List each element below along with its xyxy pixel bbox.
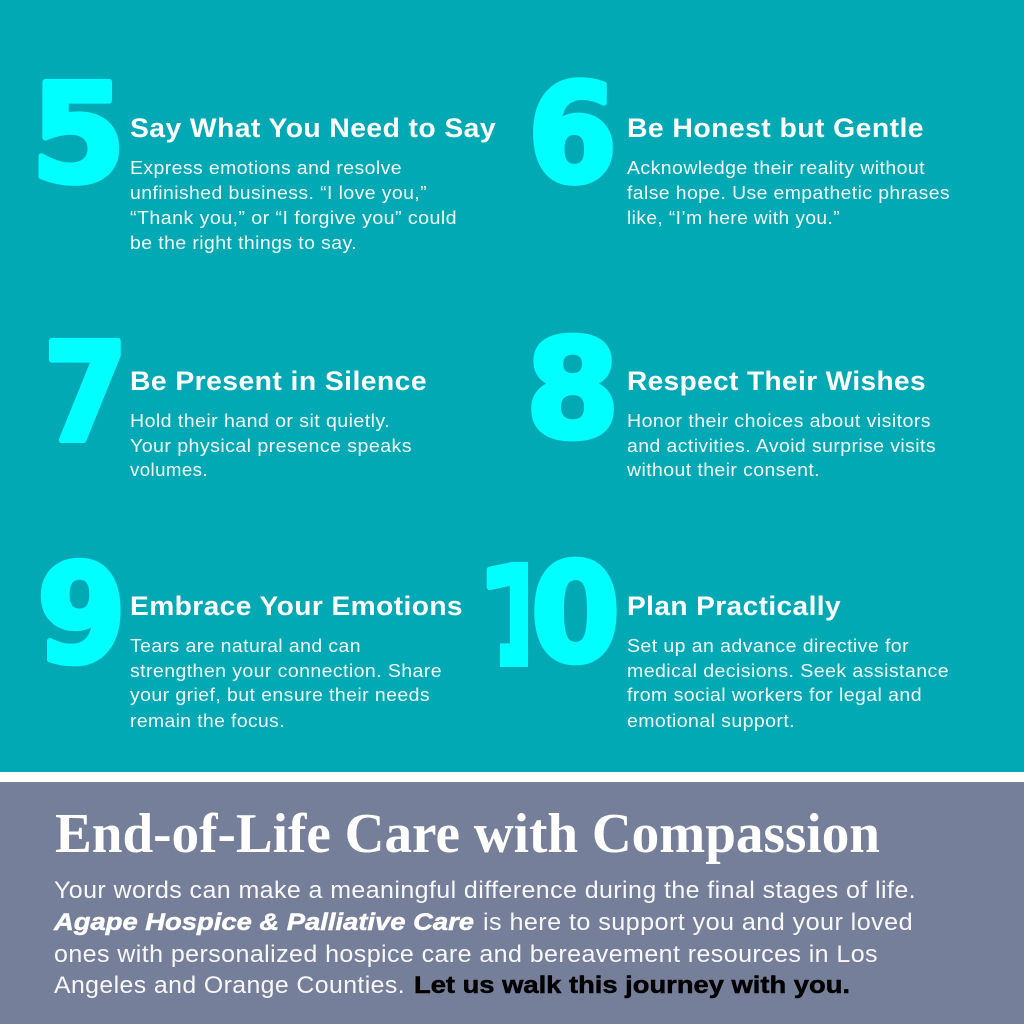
tip 7 xyxy=(44,315,427,480)
text block: tip 9 body: your grief, but ensure their needs xyxy=(130,684,430,705)
footer text block: Let us walk this journey with you. xyxy=(414,972,850,999)
number 10 xyxy=(486,556,617,667)
panel: teal tips background xyxy=(0,0,1024,772)
number 8: 8 xyxy=(526,311,619,469)
tip 8 xyxy=(526,311,936,480)
text block: tip 7 body: Hold their hand or sit quietly. xyxy=(130,410,390,431)
text block: tip 8 body: Honor their choices about visitors xyxy=(627,410,931,431)
text block: tip 10 body: emotional support. xyxy=(627,710,795,731)
text block: tip 8 body: without their consent. xyxy=(626,459,820,480)
text block: tip 9 body xyxy=(130,635,442,731)
text block: tip 5 body xyxy=(130,157,457,253)
text block: tip 10 body: Set up an advance directive for xyxy=(627,635,909,656)
tip 6 xyxy=(528,55,950,228)
text block: tip 6 body xyxy=(627,157,950,228)
white divider band xyxy=(0,772,1024,782)
text block: tip 9 body: strengthen your connection. Share xyxy=(130,660,442,681)
number 6: 6 xyxy=(528,55,617,214)
footer text block: Your words can make a meaningful difference during the final stages of life. xyxy=(54,877,916,904)
heading: Plan Practically: Plan Practically xyxy=(627,591,841,621)
text block: tip 10 body: medical decisions. Seek assistance xyxy=(627,660,949,681)
text block: tip 8 body xyxy=(626,410,936,480)
number 5: 5 xyxy=(31,56,126,214)
footer text block xyxy=(53,877,916,999)
text block: tip 9 body: remain the focus. xyxy=(130,710,285,731)
heading: Be Present in Silence: Be Present in Silence xyxy=(130,366,427,396)
text block: tip 5 body: unfinished business. “I love you,” xyxy=(130,182,427,203)
tip 9 xyxy=(37,536,463,731)
footer text block: Agape Hospice & Palliative Care xyxy=(53,909,474,936)
text block: tip 7 body: volumes. xyxy=(130,459,208,480)
number 7: 7 xyxy=(44,315,128,473)
footer text block: Angeles and Orange Counties. xyxy=(54,972,405,999)
text block: tip 6 body: like, “I’m here with you.” xyxy=(627,207,840,228)
footer title: End-of-Life Care with Compassion xyxy=(55,803,880,865)
text block: tip 7 body: Your physical presence speaks xyxy=(130,435,412,456)
footer text block: ones with personalized hospice care and bereavement resources in Los xyxy=(54,941,878,968)
heading: Embrace Your Emotions: Embrace Your Emotions xyxy=(130,591,463,621)
tip 10 xyxy=(486,556,948,731)
panel: footer background xyxy=(0,782,1024,1024)
text block: tip 7 body xyxy=(130,410,412,480)
footer text block: is here to support you and your loved xyxy=(483,909,913,936)
heading: Say What You Need to Say: Say What You Need to Say xyxy=(130,113,496,143)
text block: tip 5 body: be the right things to say. xyxy=(130,232,357,253)
text block: tip 6 body: false hope. Use empathetic phrases xyxy=(627,182,950,203)
text block: tip 5 body: “Thank you,” or “I forgive you” could xyxy=(130,207,457,228)
text block: tip 10 body: from social workers for legal and xyxy=(627,684,922,705)
text block: tip 9 body: Tears are natural and can xyxy=(130,635,361,656)
text block: tip 8 body: and activities. Avoid surprise visits xyxy=(627,435,936,456)
number 10: 0 xyxy=(531,535,620,693)
text block: tip 10 body xyxy=(627,635,949,731)
text block: tip 5 body: Express emotions and resolve xyxy=(130,157,402,178)
heading: Be Honest but Gentle: Be Honest but Gentle xyxy=(627,113,924,143)
number 9: 9 xyxy=(37,536,126,694)
number 10: 1 xyxy=(474,539,569,697)
heading: Respect Their Wishes: Respect Their Wishes xyxy=(627,366,926,396)
tip 5 xyxy=(31,56,496,253)
text block: tip 6 body: Acknowledge their reality without xyxy=(627,157,925,178)
